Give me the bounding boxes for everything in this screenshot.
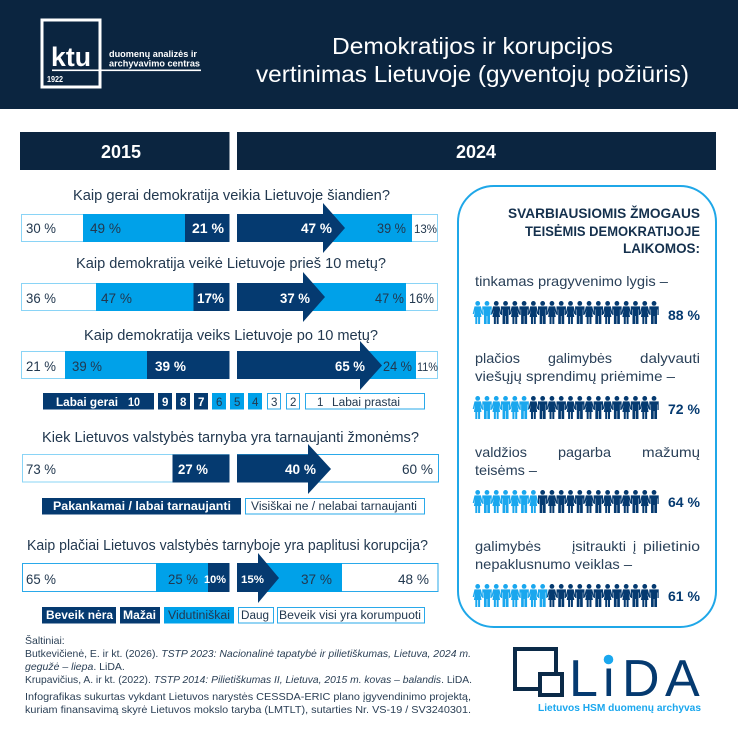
legend: corruption: Vidutiniškai <box>168 610 230 622</box>
panel heading: LAIKOMOS: <box>623 241 700 256</box>
legend: scale 1-10: 9 <box>162 397 168 409</box>
icon row 88 % <box>473 301 659 324</box>
header band <box>0 0 738 109</box>
right item 2 text: galimybės <box>548 350 612 366</box>
value 61 %: 61 % <box>668 588 701 604</box>
year heading 2015 <box>20 132 230 170</box>
right item 3 text: pagarba <box>558 444 611 460</box>
sources text <box>25 634 472 716</box>
right item 3 text: mažumų <box>642 444 700 460</box>
legend: corruption: Beveik nėra <box>46 610 114 622</box>
sources text: gegužė – liepa. LiDA. <box>25 661 125 673</box>
bar 2015 question 3: 21 % <box>26 358 56 374</box>
bar 2015 question 4 <box>22 454 230 482</box>
bar 2015 question 1: 21 % <box>192 220 225 236</box>
right item 2 text: dalyvauti <box>640 350 700 366</box>
sources text: Infografikas sukurtas vykdant Lietuvos narystės CESSDA-ERIC plano įgyvendinimo projektą, <box>25 691 471 703</box>
right item 4 text <box>475 538 700 572</box>
value 72 %: 72 % <box>668 401 701 417</box>
sources text: Šaltiniai: <box>25 634 65 647</box>
right item 3 text: valdžios <box>475 444 527 460</box>
value 88 %: 88 % <box>668 307 701 323</box>
right item 3 text <box>475 444 700 478</box>
KTU logo: archyvavimo centras <box>109 58 200 70</box>
bar 2024 question 2: 47 % <box>375 290 404 306</box>
sources text: kuriam finansavimą skyrė Lietuvos mokslo taryba (LMTLT), sutarties Nr. VS-19 / SV3240301. <box>25 704 471 716</box>
legend: scale 1-10: 8 <box>180 397 187 409</box>
bar 2024 question 4: 40 % <box>285 461 317 477</box>
bar 2024 question 2: 37 % <box>280 290 311 306</box>
KTU logo: duomenų analizės ir <box>109 49 197 60</box>
bar 2015 question 1 <box>22 214 230 242</box>
bar 2015 question 5 <box>22 563 230 592</box>
bar 2015 question 4: 27 % <box>178 461 209 477</box>
icon row 64 % <box>473 490 659 513</box>
right item 3 text: teisėms – <box>475 462 537 478</box>
legend: scale 1-10: 10 <box>128 397 140 409</box>
bar 2015 question 2: 17% <box>197 290 225 306</box>
bar 2015 question 3: 39 % <box>155 358 187 374</box>
bar 2024 question 1 <box>237 203 438 253</box>
bar 2024 question 3: 24 % <box>383 358 412 374</box>
bar 2024 question 3 <box>237 341 438 390</box>
bar 2015 question 3 <box>22 351 230 379</box>
bar 2015 question 2 <box>22 283 230 311</box>
bar 2024 question 5: 15% <box>241 574 264 586</box>
bar 2024 question 5: 37 % <box>301 571 332 587</box>
LiDA logo <box>515 649 701 714</box>
LiDA logo: Lietuvos HSM duomenų archyvas <box>538 702 701 714</box>
legend: service: Visiškai ne / nelabai tarnaujanti <box>251 501 417 513</box>
icon row 61 % <box>473 584 659 607</box>
right item 4 text: įsitraukti <box>572 538 626 554</box>
bar 2024 question 4: 60 % <box>402 461 433 477</box>
legend: scale 1-10: 2 <box>290 397 296 409</box>
panel heading: SVARBIAUSIOMIS ŽMOGAUS <box>508 206 700 221</box>
right item 4 text: į <box>633 538 636 554</box>
legend: scale 1-10: 3 <box>271 397 277 409</box>
KTU logo: ktu <box>51 42 91 72</box>
legend: scale 1-10: 1 <box>317 397 323 409</box>
bar 2024 question 1: 47 % <box>301 220 333 236</box>
KTU logo <box>42 20 201 87</box>
bar 2015 question 3: 39 % <box>72 358 102 374</box>
title: vertinimas Lietuvoje (gyventojų požiūris) <box>256 61 689 87</box>
bar 2015 question 5: 25 % <box>168 571 198 587</box>
bar 2024 question 4 <box>237 444 438 494</box>
question 2: Kaip demokratija veikė Lietuvoje prieš 10 metų? <box>76 256 386 272</box>
legend: scale 1-10: 6 <box>216 397 222 409</box>
question 1: Kaip gerai demokratija veikia Lietuvoje šiandien? <box>73 188 390 204</box>
bar 2015 question 2: 36 % <box>26 290 56 306</box>
bar 2015 question 5: 65 % <box>26 571 56 587</box>
legend: corruption: Daug <box>241 610 269 622</box>
right item 2 text <box>475 350 700 384</box>
legend: scale 1-10: 7 <box>198 397 204 409</box>
sources text: Butkevičienė, E. ir kt. (2026). TSTP 2023: Nacionalinė tapatybė ir pilietiškumas, Lietuva, 2024 m. <box>25 648 471 660</box>
bar 2024 question 1: 13% <box>414 222 437 236</box>
legend: scale 1-10: 5 <box>234 397 240 409</box>
icon row 72 % <box>473 396 659 419</box>
question 5: Kaip plačiai Lietuvos valstybės tarnyboje yra paplitusi korupcija? <box>27 538 428 554</box>
bar 2024 question 2: 16% <box>409 290 434 306</box>
right item 2 text: plačios <box>475 350 520 366</box>
question 4: Kiek Lietuvos valstybės tarnyba yra tarnaujanti žmonėms? <box>42 430 419 446</box>
legend: corruption: Beveik visi yra korumpuoti <box>279 610 421 622</box>
right item 1 text: tinkamas pragyvenimo lygis – <box>475 273 668 289</box>
bar 2015 question 1: 49 % <box>90 220 121 236</box>
year heading 2015: 2015 <box>101 142 141 162</box>
year heading 2024: 2024 <box>456 142 496 162</box>
bar 2024 question 1: 39 % <box>377 220 406 236</box>
right item 4 text: galimybės <box>475 538 541 554</box>
bar 2015 question 4: 73 % <box>26 461 56 477</box>
legend: corruption <box>42 607 424 624</box>
panel heading: TEISĖMIS DEMOKRATIJOJE <box>525 224 700 239</box>
right item 2 text: viešųjų sprendimų priėmime – <box>475 368 675 384</box>
legend: scale 1-10: 4 <box>252 397 259 409</box>
sources text: Krupavičius, A. ir kt. (2022). TSTP 2014: Pilietiškumas II, Lietuva, 2015 m. kovas – balandis. LiDA. <box>25 674 472 686</box>
right item 4 text: nepaklusnumo veiklas – <box>475 556 632 572</box>
legend: scale 1-10: Labai prastai <box>332 397 400 409</box>
legend: service: Pakankamai / labai tarnaujanti <box>53 501 231 513</box>
panel: human rights <box>458 186 716 627</box>
bar 2024 question 2 <box>237 272 438 322</box>
legend: service <box>42 498 424 514</box>
right item 4 text: pilietinio <box>643 538 700 554</box>
question 3: Kaip demokratija veiks Lietuvoje po 10 metų? <box>84 328 378 344</box>
year heading 2024 <box>237 132 716 170</box>
bar 2024 question 3: 11% <box>417 360 438 374</box>
legend: scale 1-10: Labai gerai <box>56 397 118 409</box>
value 64 %: 64 % <box>668 494 701 510</box>
bar 2015 question 1: 30 % <box>26 220 56 236</box>
title: Demokratijos ir korupcijos <box>332 33 613 59</box>
bar 2024 question 5: 48 % <box>398 571 429 587</box>
bar 2024 question 5 <box>237 553 438 603</box>
LiDA logo: LiDA <box>569 650 700 708</box>
KTU logo: 1922 <box>47 75 63 84</box>
panel heading <box>508 206 700 256</box>
bar 2024 question 3: 65 % <box>335 358 366 374</box>
bar 2015 question 5: 10% <box>204 574 226 586</box>
legend: scale 1-10 <box>43 393 424 410</box>
legend: corruption: Mažai <box>123 610 156 622</box>
title <box>256 33 689 87</box>
bar 2015 question 2: 47 % <box>101 290 132 306</box>
